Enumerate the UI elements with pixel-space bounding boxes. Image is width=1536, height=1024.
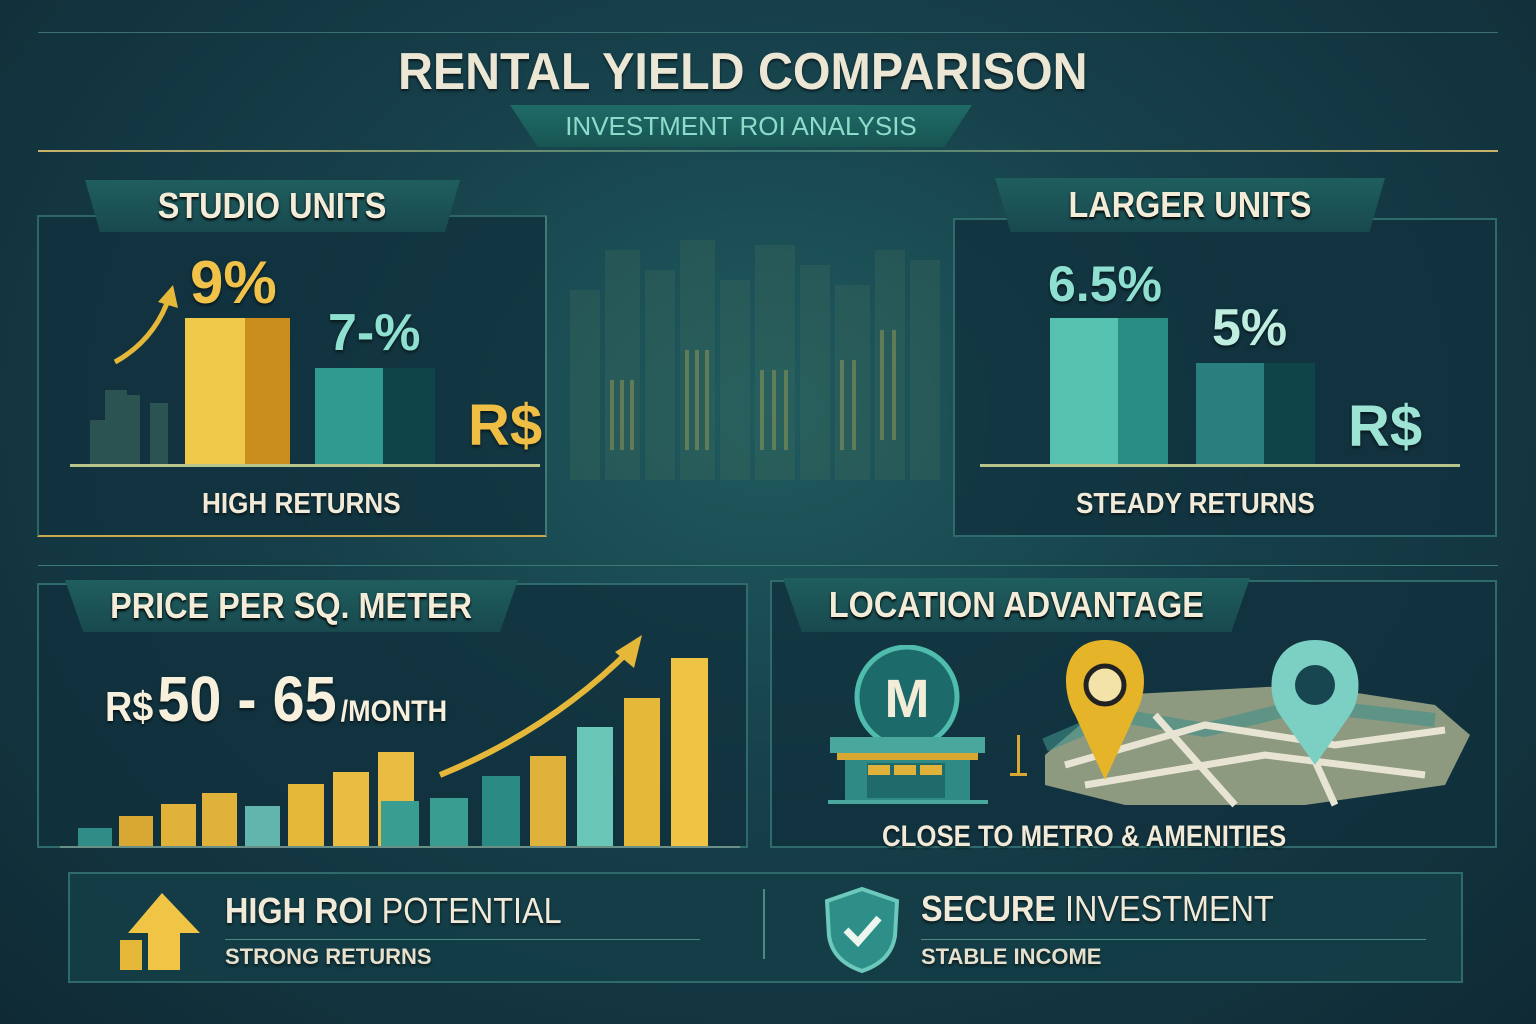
panel: price per sq meter: [37, 583, 748, 848]
heading: larger units: [995, 178, 1385, 232]
panel: larger units: [953, 218, 1497, 537]
value: 5%: 5%: [1212, 299, 1287, 357]
text: stable income: STABLE INCOME: [921, 944, 1101, 969]
subtitle banner: [510, 105, 972, 147]
label: close to metro: CLOSE TO METRO & AMENITIES: [882, 820, 1286, 853]
panel: bottom summary: [68, 872, 1463, 983]
icon: map with pins: [1010, 640, 1470, 808]
heading: price per sq meter: [65, 580, 518, 632]
text: strong returns: STRONG RETURNS: [225, 944, 432, 969]
icon: metro station: [828, 645, 988, 804]
subtitle banner: INVESTMENT ROI ANALYSIS: [565, 110, 917, 140]
value: 7-%: 7-%: [328, 304, 420, 362]
heading: location advantage: LOCATION ADVANTAGE: [829, 584, 1204, 625]
chart: studio bars: [70, 285, 540, 467]
value: price range: R$ 50 - 65 /MONTH: [105, 663, 447, 735]
heading: studio units: STUDIO UNITS: [158, 185, 387, 226]
heading: studio units: [85, 180, 460, 232]
icon: shield: [824, 886, 900, 974]
chart: larger bars: [980, 318, 1460, 467]
chart: price bars: [60, 635, 740, 848]
icon: metro station: M: [885, 669, 929, 729]
title: RENTAL YIELD COMPARISON: [398, 43, 1088, 101]
city skyline: [570, 240, 940, 480]
icon: up arrow: [120, 893, 200, 970]
icon: R$ teal: R$: [1348, 394, 1422, 459]
value: 6.5%: 6.5%: [1048, 256, 1162, 312]
label: steady returns: STEADY RETURNS: [1076, 488, 1315, 520]
heading: location advantage: [783, 578, 1250, 632]
panel: studio units: [37, 215, 547, 537]
text: high roi potential: HIGH ROI POTENTIAL: [225, 890, 562, 931]
heading: price per sq meter: PRICE PER SQ. METER: [111, 585, 472, 626]
panel: location advantage: [770, 580, 1497, 848]
heading: larger units: LARGER UNITS: [1068, 184, 1312, 225]
label: high returns: HIGH RETURNS: [202, 488, 401, 520]
text: secure investment: SECURE INVESTMENT: [921, 888, 1274, 929]
value: 9%: 9%: [190, 249, 277, 316]
icon: R$ gold: R$: [468, 393, 542, 458]
decorative lines: [38, 32, 1498, 33]
